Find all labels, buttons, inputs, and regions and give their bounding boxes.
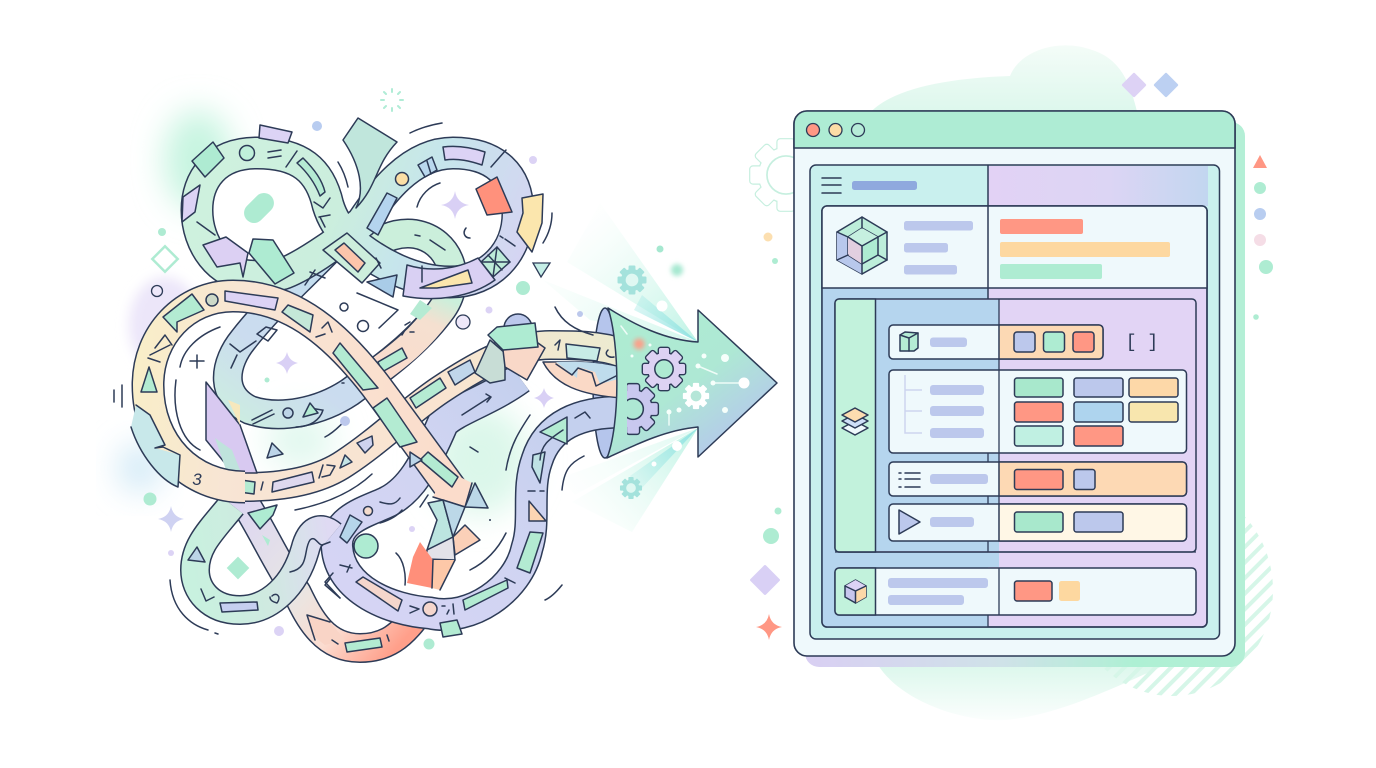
- title bar: [794, 111, 1235, 148]
- icon: lavender gear in arrow: [643, 348, 685, 390]
- ribbon: main peach loop with pointed end: [131, 291, 472, 507]
- ribbon: lavender S-curve from arrow mouth: [337, 378, 622, 616]
- icon: small cube: [845, 580, 866, 603]
- hatch stripes: [1071, 484, 1273, 696]
- hero card: [822, 206, 1207, 299]
- tangle accent dots and shapes: [144, 121, 583, 650]
- browser window: [794, 111, 1235, 656]
- ribbon: upper peach band into arrow: [209, 340, 622, 494]
- icon: play triangle: [899, 510, 920, 534]
- sunburst ticks: [381, 89, 403, 111]
- row: toolbar: [889, 325, 1103, 359]
- header strip right: [988, 166, 1208, 206]
- tile cluster upper near arrow: [440, 314, 545, 637]
- icon: hamburger menu: [822, 178, 841, 193]
- ribbon: figure-eight top loops: [182, 125, 543, 299]
- row: tree and chip grid: [889, 370, 1186, 453]
- arrow sparkles: [621, 326, 750, 425]
- tile cluster lower diagonal tip: [407, 483, 488, 590]
- hero placeholder lines: [904, 221, 973, 274]
- arrow: main funnel body: [607, 308, 777, 458]
- sparkle stars: [158, 191, 554, 532]
- inner content frame: [822, 206, 1207, 627]
- clear centres of the loops: [153, 168, 308, 475]
- icon: teal gear upper ray: [618, 266, 646, 294]
- icon: teal gear lower ray: [620, 477, 642, 499]
- icon: isometric cube: [837, 217, 887, 274]
- window control dots: [806, 124, 864, 136]
- ray sparkle dots: [652, 246, 683, 466]
- lavender wedge: [206, 382, 277, 546]
- soft glows behind the tangle: [118, 110, 530, 515]
- row: list: [889, 462, 1186, 496]
- main nested panel: [835, 299, 1196, 552]
- ribbon: main peach loop with pointed end: 3: [192, 470, 202, 489]
- left-of-window decoration shapes: [749, 232, 782, 640]
- infographic canvas: [108, 46, 1273, 712]
- row: play: [889, 504, 1186, 541]
- ribbon: mint lower-left loop: [188, 505, 332, 612]
- arrow: funnel mouth rim: [593, 308, 617, 458]
- icon: lavender half gear in arrow: [627, 382, 660, 436]
- brackets label: [ ]: [1126, 333, 1158, 353]
- ribbon: peach lower strand: [240, 495, 420, 652]
- colour split between panels: [988, 553, 999, 567]
- window drop shadow: [805, 122, 1245, 667]
- hero colour bars: [1000, 219, 1170, 279]
- background blob top: [868, 45, 1138, 115]
- header title bar: [852, 181, 917, 190]
- tangled ribbons: [131, 125, 622, 652]
- tile cluster: chevrons on the figure-eight crossing: [305, 233, 398, 332]
- background blob bottom: [878, 665, 1165, 720]
- right-side decoration shapes: [1121, 72, 1273, 320]
- top shard shape: [343, 118, 397, 208]
- icon: stacked layers: [842, 408, 868, 435]
- icon: small box: [900, 332, 918, 351]
- ribbon: blue-mint central strand: [228, 233, 452, 424]
- tangle ink marks: [114, 123, 593, 634]
- outer content frame: [810, 165, 1220, 639]
- outlined gear behind window: [750, 139, 822, 211]
- icon: white gear in arrow: [683, 383, 709, 409]
- light rays around the arrow: [543, 203, 698, 532]
- bottom card: [835, 568, 1196, 615]
- lens ribbon with zigzag: [543, 362, 622, 398]
